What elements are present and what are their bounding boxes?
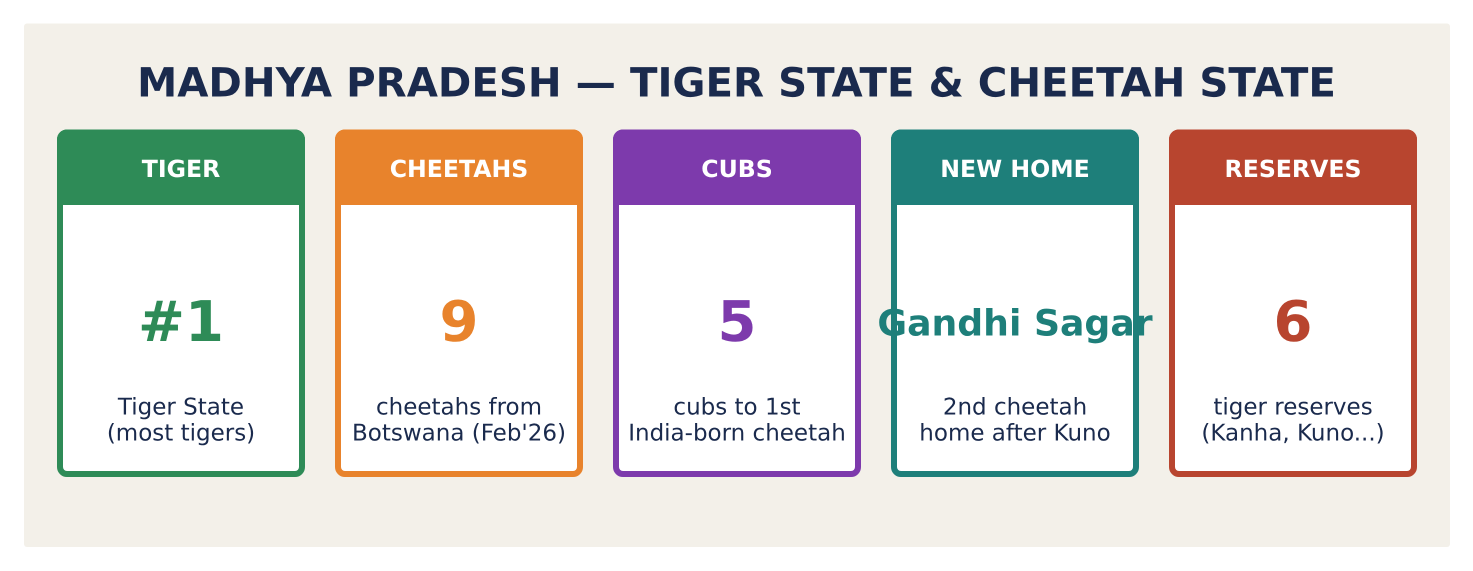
new home description: home after Kuno (919, 420, 1111, 446)
reserves number: 6 (1274, 290, 1312, 355)
tiger description: (most tigers) (107, 420, 255, 446)
cubs header label: CUBS (701, 155, 773, 183)
panel: cheetahs (335, 130, 583, 474)
reserves description: (Kanha, Kuno...) (1201, 420, 1385, 446)
cheetahs number: 9 (440, 290, 478, 355)
cheetahs header label: CHEETAHS (390, 155, 528, 183)
reserves header label: RESERVES (1225, 155, 1361, 183)
cheetahs description: cheetahs from (376, 394, 542, 420)
panel: cubs (613, 130, 861, 474)
panel: new home (877, 130, 1153, 474)
new home description: 2nd cheetah (943, 394, 1087, 420)
panel: reserves (1169, 130, 1417, 474)
cheetahs header (335, 130, 583, 205)
cubs description: India-born cheetah (628, 420, 846, 446)
tiger number: #1 (138, 290, 224, 355)
cheetahs description: Botswana (Feb'26) (352, 420, 566, 446)
new home value: Gandhi Sagar (877, 302, 1153, 344)
reserves description: tiger reserves (1213, 394, 1373, 420)
tiger header label: TIGER (142, 155, 220, 183)
new home header label: NEW HOME (940, 155, 1090, 183)
new home header (891, 130, 1139, 205)
cubs number: 5 (718, 290, 756, 355)
reserves header (1169, 130, 1417, 205)
tiger header (57, 130, 305, 205)
tiger description: Tiger State (118, 394, 244, 420)
title: MADHYA PRADESH — TIGER STATE & CHEETAH STATE (137, 60, 1336, 106)
cubs header (613, 130, 861, 205)
panel: tiger (57, 130, 305, 474)
cubs description: cubs to 1st (673, 394, 801, 420)
